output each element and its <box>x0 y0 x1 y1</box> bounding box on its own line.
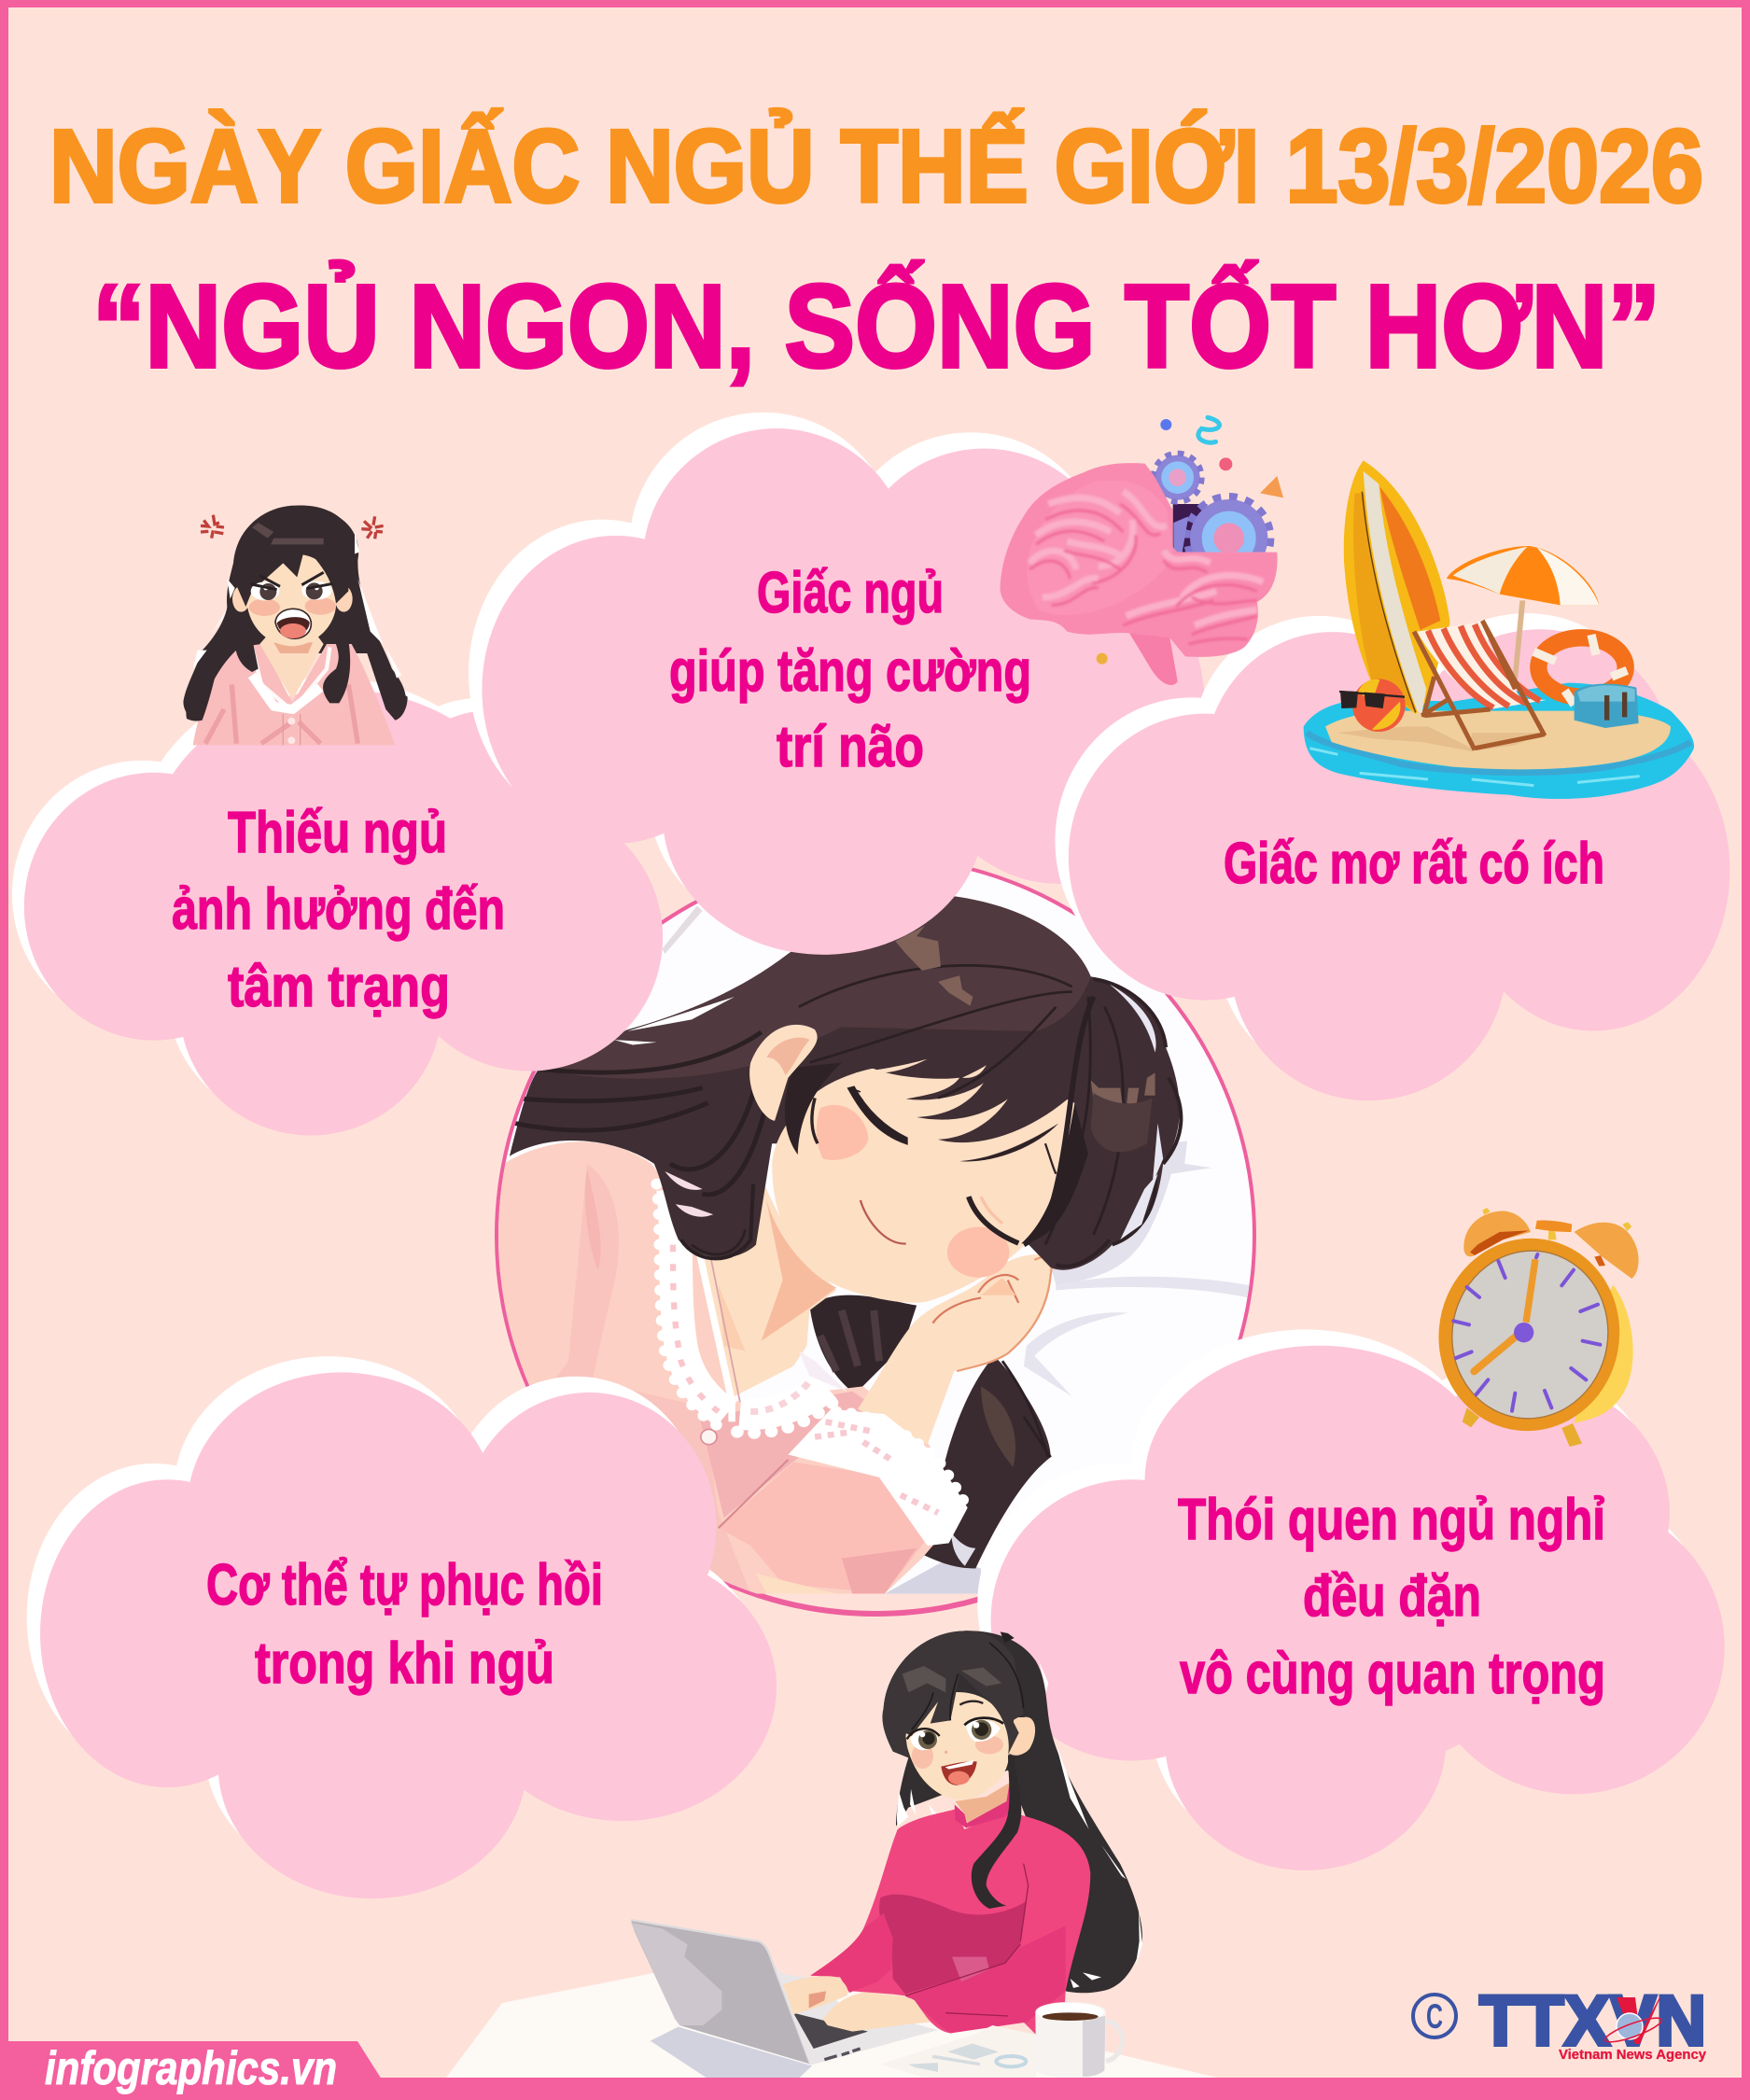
text: routine: Thói quen ngủ nghỉ <box>1178 1488 1605 1552</box>
icon: angry girl <box>183 506 408 745</box>
text: routine: vô cùng quan trọng <box>1180 1642 1605 1706</box>
illustration: sleeping girl in circle <box>495 868 1256 1617</box>
desk <box>446 1973 1217 2078</box>
text: routine: đều đặn <box>1303 1564 1481 1629</box>
text: brain: Giấc ngủ <box>757 561 944 625</box>
text: brain: giúp tăng cường <box>669 639 1031 704</box>
icon: beach island <box>1304 460 1694 799</box>
cloud: mood <box>12 678 663 1136</box>
cloud: dreams <box>1055 613 1729 1100</box>
illustration: girl with laptop <box>446 1631 1217 2078</box>
lace placket <box>673 1189 726 1414</box>
icon: alarm clock <box>1423 1208 1639 1447</box>
logo: TTXVN: TTXVN <box>1479 1981 1706 2061</box>
text: mood: Thiếu ngủ <box>228 801 447 865</box>
logo: copyright mark: C <box>1426 1997 1443 2036</box>
icon: brain with gears <box>1001 417 1283 685</box>
cloud: routine <box>977 1330 1725 1870</box>
logo: copyright mark <box>1413 1995 1456 2037</box>
logo: TTXVN: Vietnam News Agency <box>1559 2048 1706 2063</box>
cloud: brain <box>469 413 1205 955</box>
text: dreams: Giấc mơ rất có ích <box>1224 832 1604 896</box>
text: mood: tâm trạng <box>228 955 450 1019</box>
cuff lace <box>788 1409 968 1546</box>
text: brain <box>669 561 1031 779</box>
text: brain: trí não <box>777 715 924 779</box>
text: mood: ảnh hưởng đến <box>172 877 505 942</box>
text: recovery <box>206 1553 603 1696</box>
text: recovery: trong khi ngủ <box>255 1631 554 1696</box>
text: routine <box>1178 1488 1605 1706</box>
text: recovery: Cơ thể tự phục hồi <box>206 1553 603 1617</box>
footer tag: infographics.vn <box>45 2042 337 2094</box>
cloud: recovery <box>27 1356 777 1898</box>
text: mood <box>172 801 505 1019</box>
